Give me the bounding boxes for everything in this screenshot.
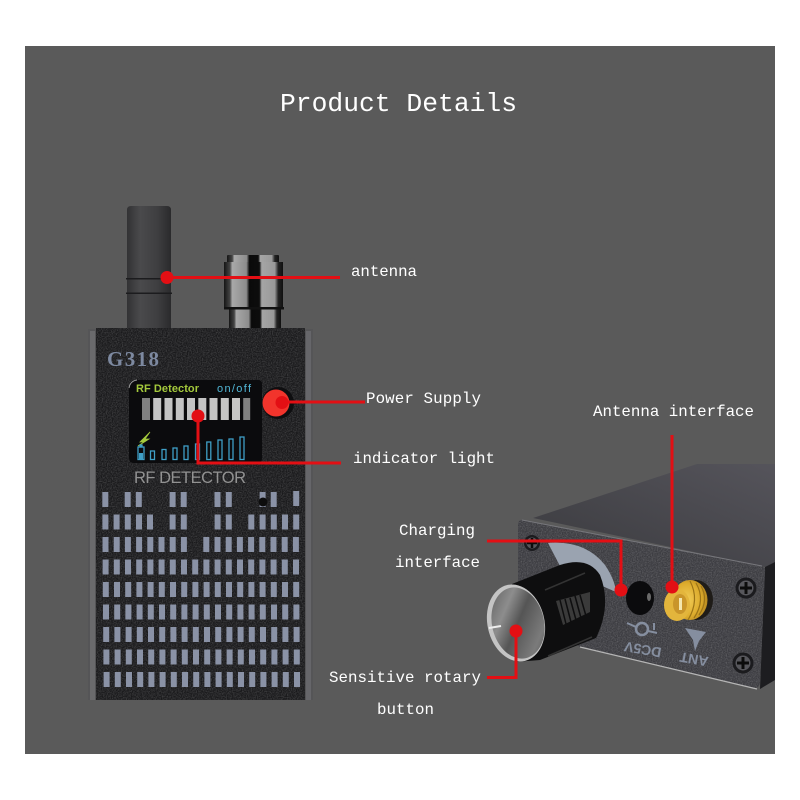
lightning icon [138,432,150,446]
callout: antenna interface: Antenna interface [593,403,754,421]
callout: antenna interface [593,403,754,594]
RF Detector label: RF Detector [136,383,200,395]
lower edge highlight [580,647,757,689]
LED bars [142,398,250,420]
model name G318: G318 [107,347,159,371]
callout: indicator light [192,410,495,468]
callout: indicator light: indicator light [353,450,495,468]
upper edge highlight [522,520,762,566]
DC5V mark [622,623,663,661]
callout: sensitive rotary button [329,624,522,719]
speaker hole [258,498,268,506]
display panel [129,380,262,463]
charging jack [626,581,654,615]
antenna [126,206,172,329]
right side face [760,562,775,689]
callout: charging interface: interface [395,554,480,572]
red power button [262,387,294,419]
callout: power supply [276,390,481,409]
callout: antenna [160,263,417,284]
DC5V mark: DC5V [622,638,663,661]
battery icon [138,445,144,460]
device body [88,328,313,700]
on/off label: on/off [217,383,252,395]
callout: antenna: antenna [351,263,417,281]
signal strength bars [150,437,244,460]
callout: charging interface [395,522,628,596]
top rotary knob [224,255,284,328]
callout: sensitive rotary button: button [377,701,434,719]
RF DETECTOR printed text: RF DETECTOR [134,469,246,487]
callout: sensitive rotary button: Sensitive rotary [329,669,481,687]
sensitive rotary knob [479,562,605,667]
device: front view of G318 detector [88,206,313,700]
top face [533,464,775,567]
device: rear view with ports [479,464,775,689]
screws [524,535,756,674]
callout: power supply: Power Supply [366,390,481,408]
knob reflection [548,543,616,592]
callout: charging interface: Charging [399,522,475,540]
ventilation slot grid [102,498,301,680]
ANT mark [678,628,710,670]
SMA gold antenna connector [664,580,713,621]
ANT mark: ANT [678,649,710,670]
title: Product Details [280,89,517,119]
front face [518,520,765,688]
